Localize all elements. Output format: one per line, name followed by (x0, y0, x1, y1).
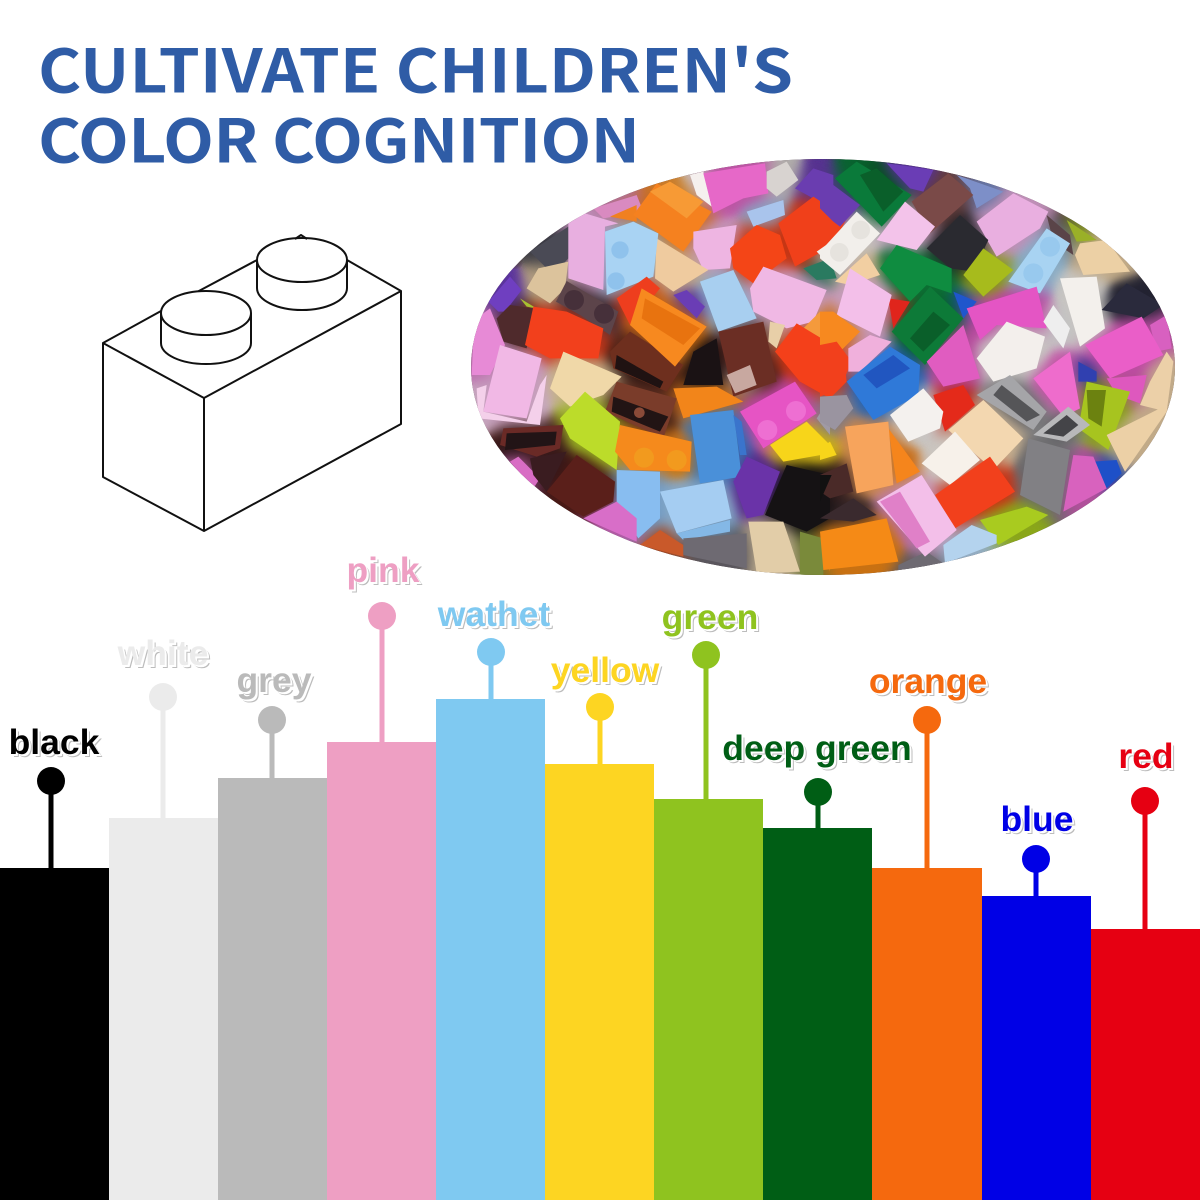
label: red: red (1118, 736, 1174, 776)
label: orange: orange (869, 661, 987, 701)
bar: blue (982, 845, 1091, 1200)
bricks: left half of photo (472, 162, 847, 575)
label: blue: blue (1000, 799, 1073, 839)
bar: black (0, 767, 109, 1200)
label: wathet: wathet (438, 594, 550, 634)
bar: white (109, 683, 218, 1200)
bar: green (654, 641, 763, 1200)
label: yellow: yellow (551, 650, 659, 690)
label: white: white (118, 633, 208, 673)
title (38, 24, 793, 181)
icon: brick line drawing (103, 235, 401, 531)
label: grey: grey (236, 660, 312, 700)
bricks: right half of photo (820, 162, 1173, 575)
bar: orange (872, 706, 982, 1200)
label: pink: pink (346, 550, 419, 590)
photo: pile of colourful bricks (465, 150, 1185, 580)
bar: yellow (545, 693, 654, 1200)
bar: grey (218, 706, 327, 1200)
label: green: green (662, 597, 758, 637)
bar: deep green (763, 778, 872, 1200)
bar: red (1091, 787, 1200, 1200)
title: CULTIVATE CHILDREN'S (38, 24, 793, 111)
bar: wathet (436, 638, 545, 1200)
label: deep green: deep green (722, 728, 912, 768)
label: black: black (9, 722, 99, 762)
bar: pink (327, 602, 436, 1200)
title: COLOR COGNITION (38, 94, 640, 181)
